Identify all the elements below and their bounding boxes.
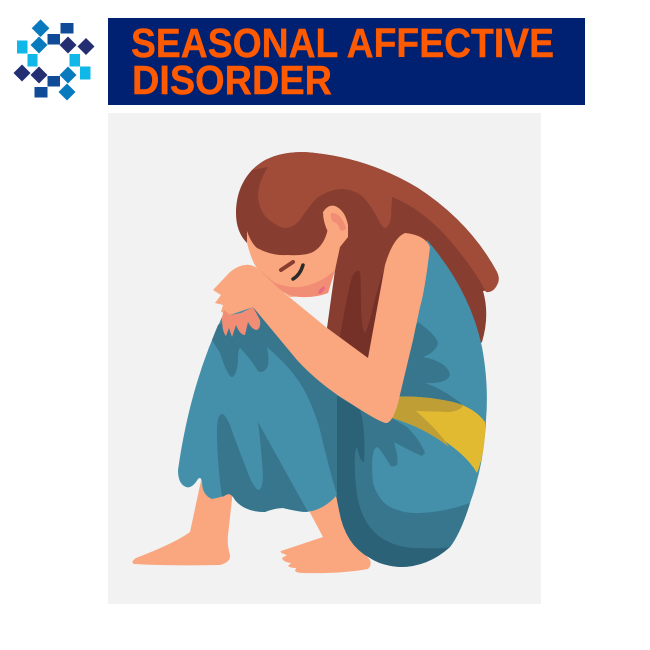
lips <box>318 286 325 294</box>
hair highlight <box>252 152 499 292</box>
illustration: sad woman hugging knees <box>132 152 499 573</box>
far foot <box>281 490 371 573</box>
back dress <box>336 240 487 567</box>
chin shadow <box>257 268 335 297</box>
face <box>247 220 348 297</box>
skirt upper folds <box>212 307 337 495</box>
title: DISORDER <box>132 57 332 103</box>
title: SEASONAL AFFECTIVE <box>131 20 554 66</box>
dress upper fold <box>392 322 463 420</box>
hair back <box>236 152 498 380</box>
near leg and foot <box>132 476 233 565</box>
fingers <box>222 307 260 337</box>
skirt <box>178 307 337 512</box>
belt shadow <box>392 397 463 447</box>
ear <box>323 206 348 244</box>
fringe hair <box>238 170 348 255</box>
inner ear <box>331 213 346 231</box>
logo <box>14 19 94 100</box>
belt <box>392 397 485 473</box>
hair shadow <box>340 245 395 362</box>
skirt lower folds <box>217 414 308 512</box>
closed eye <box>293 265 303 279</box>
illustration panel <box>108 113 541 604</box>
eyebrow <box>281 262 293 270</box>
title banner <box>108 18 585 105</box>
near arm <box>213 233 430 423</box>
dress lower fold <box>336 395 470 556</box>
dress dark fold <box>336 395 450 567</box>
